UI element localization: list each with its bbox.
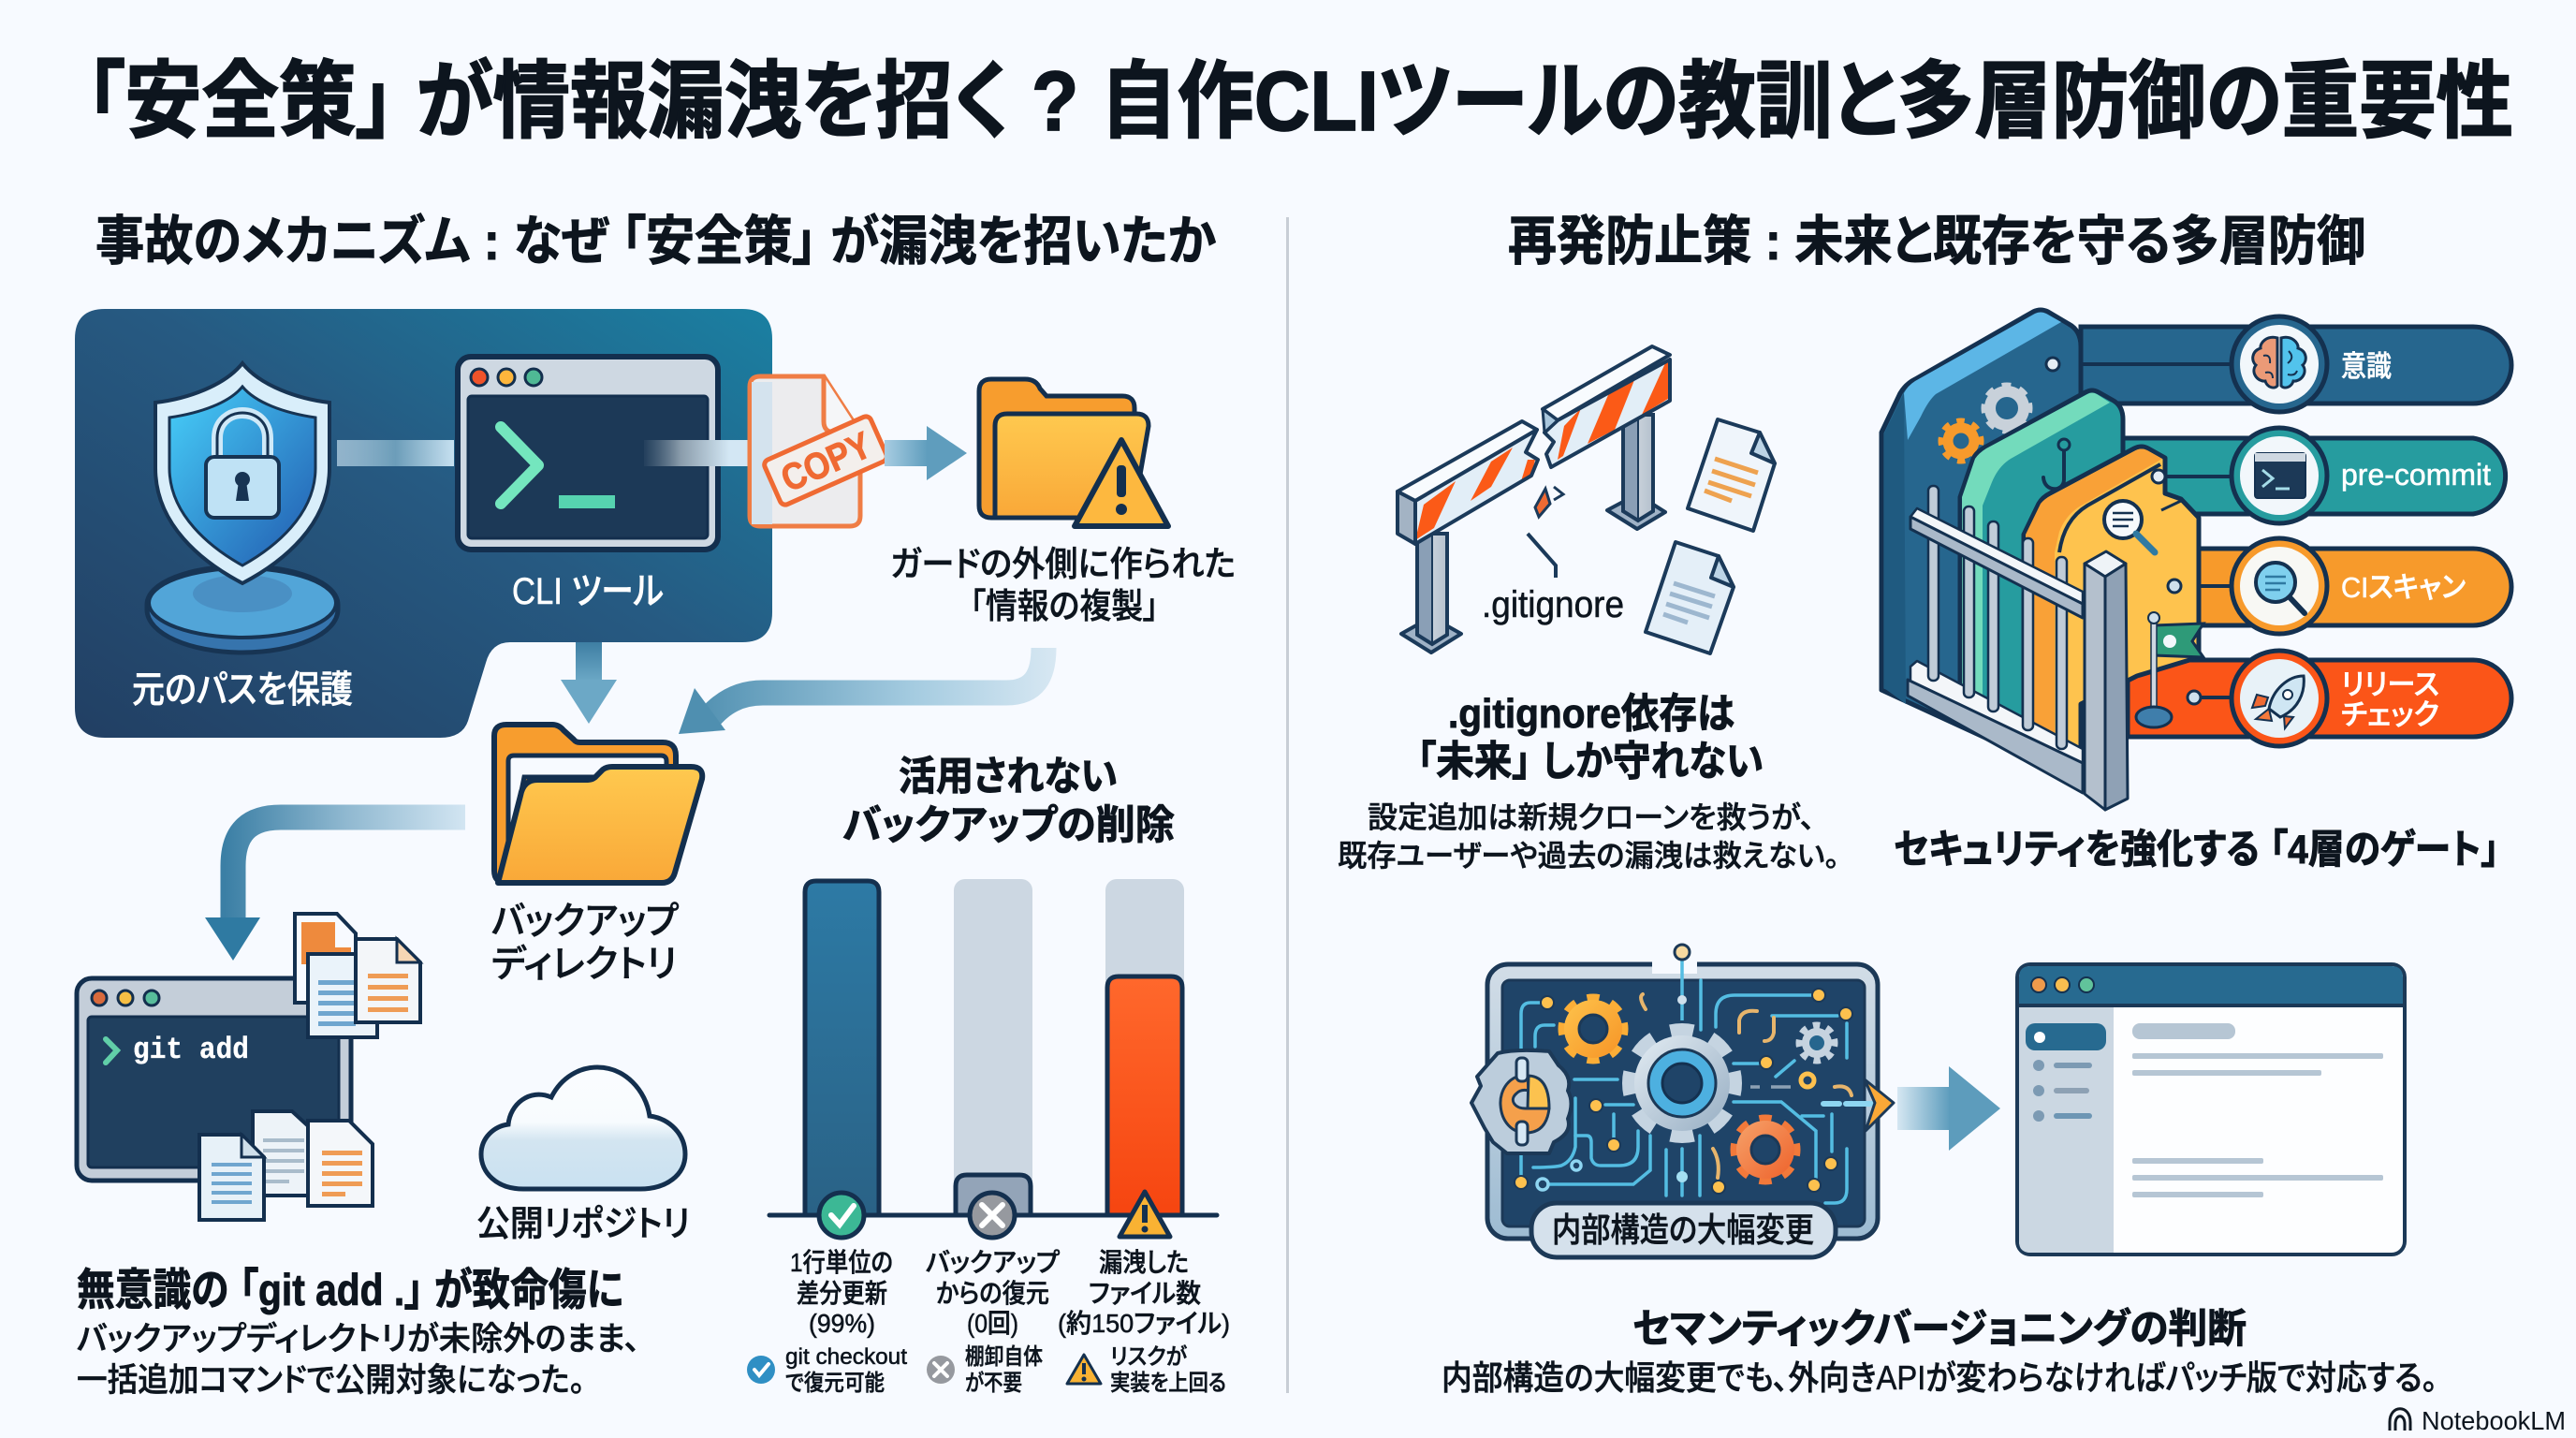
gate plate: teal <box>1960 390 2123 749</box>
illustration: four layer gate <box>1881 310 2511 810</box>
legend: inventory unnecessary: が不要 <box>965 1371 1022 1396</box>
layer pill: pre-commit: pre-commit <box>2341 458 2491 492</box>
circuit nodes <box>1515 989 1852 1194</box>
text block: semantic versioning: 内部構造の大幅変更でも、外向きAPIが変わらなければパッチ版で対応する。 <box>1442 1358 2437 1397</box>
legend: git checkout <box>747 1344 907 1396</box>
heading: right section: 再発防止策 : 未来と既存を守る多層防御 <box>1508 212 2365 271</box>
layer pill: release check: チェック <box>2341 698 2439 731</box>
documents: bottom group <box>199 1111 373 1220</box>
label: backup directory <box>491 901 680 985</box>
icon: copied document with COPY stamp: COPY <box>775 424 878 500</box>
icon: copied document with COPY stamp <box>750 376 888 526</box>
text block: semantic versioning <box>1442 1307 2437 1397</box>
legend: risk exceeds implementation <box>1067 1344 1226 1396</box>
chevron output <box>1865 1079 1894 1131</box>
chart label: one-line diff: (99%) <box>809 1309 875 1338</box>
layer pill: release check <box>2128 651 2511 746</box>
legend: inventory unnecessary <box>927 1344 1043 1396</box>
chart label: leaked files: ファイル数 <box>1089 1279 1201 1308</box>
document: orange lines <box>1688 419 1775 531</box>
gear: large centre <box>1629 1030 1735 1137</box>
label: copies made outside the guard <box>890 545 1236 625</box>
text block: git add fatal wound: 一括追加コマンドで公開対象になった。 <box>77 1362 585 1399</box>
pill: label <box>1531 1203 1836 1257</box>
illustration: broken gitignore barricade <box>1398 346 1775 653</box>
bar: restore from backup <box>956 1175 1031 1215</box>
broken fragments <box>1528 487 1563 578</box>
chart label: one-line diff: 1行単位の <box>790 1248 893 1277</box>
layer pill: release check: リリース <box>2341 668 2439 701</box>
front fence <box>1908 486 2128 810</box>
bar: one-line diff update <box>805 881 879 1215</box>
arrow: curved from copy to backup folder <box>679 648 1044 734</box>
gear: small grey <box>1799 1025 1835 1061</box>
text block: semantic versioning: セマンティックバージョニングの判断 <box>1632 1307 2247 1352</box>
chart label: leaked files: (約150ファイル) <box>1058 1309 1230 1338</box>
chart label: one-line diff <box>790 1248 893 1338</box>
text block: gitignore only protects the future: 「未来」 しか守れない <box>1417 739 1764 785</box>
chart label: restore from backup: バックアップ <box>926 1248 1061 1277</box>
text block: git add fatal wound: 無意識の 「git add .」 が致命傷に <box>77 1265 623 1314</box>
chart label: restore from backup: (0回) <box>967 1309 1018 1338</box>
icon: backup folder <box>494 725 702 883</box>
label: protect original path: 元のパスを保護 <box>132 669 353 711</box>
label: .gitignore: .gitignore <box>1482 584 1624 625</box>
text block: git add fatal wound: バックアップディレクトリが未除外のまま、 <box>77 1321 640 1357</box>
text block: git add fatal wound <box>77 1265 640 1399</box>
arrow: internal change to unchanged API <box>1897 1066 2000 1151</box>
bar: leaked files <box>1107 976 1182 1215</box>
layer pill: awareness <box>2053 316 2511 412</box>
broken link component <box>1471 1050 1571 1153</box>
label: backup directory: バックアップ <box>491 901 680 942</box>
icon: warning <box>1120 1192 1170 1237</box>
bar chart <box>769 879 1217 1238</box>
label: public repository: 公開リポジトリ <box>476 1205 690 1244</box>
label: CLI tool: CLI ツール <box>512 571 664 612</box>
arrow: copy to outside folder <box>885 426 967 480</box>
legend: git checkout: git checkout <box>785 1344 907 1370</box>
icon: git add terminal with documents: git add <box>133 1033 249 1067</box>
icon: git add terminal with documents <box>77 914 420 1220</box>
chart label: restore from backup <box>926 1248 1061 1338</box>
barricade left beam <box>1398 421 1538 544</box>
arrow: backup folder down to git add <box>205 817 465 961</box>
text block: gitignore only protects the future: .gitignore依存は <box>1448 691 1734 737</box>
chart label: restore from backup: からの復元 <box>936 1279 1049 1308</box>
legend: risk exceeds implementation: 実装を上回る <box>1110 1371 1226 1396</box>
panel: protected path <box>75 309 772 738</box>
chart label: leaked files: 漏洩した <box>1099 1248 1189 1277</box>
barricade right beam <box>1543 346 1670 467</box>
circuit traces <box>1521 980 1847 1203</box>
icon: cross <box>970 1193 1015 1238</box>
icon: check <box>819 1193 864 1238</box>
heading: bar chart: 活用されない <box>899 755 1118 800</box>
layer pill: CI scan: CIスキャン <box>2341 571 2466 604</box>
layer pill: pre-commit <box>2123 428 2506 523</box>
label: copies made outside the guard: ガードの外側に作られた <box>890 545 1236 583</box>
logo: NotebookLM: NotebookLM <box>2422 1406 2566 1435</box>
caption: four layer gate: セキュリティを強化する 「4層のゲート」 <box>1894 828 2499 873</box>
chart label: leaked files <box>1058 1248 1230 1338</box>
pill: label: 内部構造の大幅変更 <box>1552 1211 1814 1249</box>
gate plate: blue <box>1881 310 2081 782</box>
heading: left section: 事故のメカニズム : なぜ 「安全策」 が漏洩を招いたか <box>95 212 1216 271</box>
documents: top group <box>295 914 420 1037</box>
layer pill: CI scan <box>2174 538 2511 634</box>
legend: risk exceeds implementation: リスクが <box>1110 1344 1187 1370</box>
illustration: internal structure circuit board <box>1471 945 1894 1257</box>
heading: bar chart <box>842 755 1175 848</box>
gate plate: orange <box>2024 447 2199 758</box>
icon: shield on pedestal <box>147 363 338 653</box>
icon: folder with warning <box>979 379 1168 526</box>
text block: gitignore only protects the future: 既存ユーザーや過去の漏洩は救えない。 <box>1338 839 1839 873</box>
legend: inventory unnecessary: 棚卸自体 <box>965 1344 1043 1370</box>
text block: gitignore only protects the future: 設定追加は新規クローンを救うが、 <box>1368 800 1815 834</box>
document: blue lines <box>1646 542 1734 653</box>
text block: gitignore only protects the future <box>1338 691 1839 873</box>
icon: CLI terminal window <box>458 357 718 550</box>
label: backup directory: ディレクトリ <box>491 944 677 985</box>
chart label: one-line diff: 差分更新 <box>797 1279 887 1308</box>
illustration: unchanged application window <box>2017 964 2405 1255</box>
icon: cloud <box>481 1067 685 1189</box>
legend: git checkout: で復元可能 <box>785 1371 885 1396</box>
arrow: panel down to backup folder <box>561 642 617 724</box>
barricade right post <box>1607 415 1665 529</box>
gear: orange bottom <box>1734 1119 1796 1181</box>
heading: bar chart: バックアップの削除 <box>842 803 1175 848</box>
barricade left post <box>1401 534 1461 653</box>
flag and pole <box>2136 612 2203 727</box>
layer pill: awareness: 意識 <box>2341 350 2392 383</box>
gear: orange top <box>1562 998 1624 1060</box>
label: copies made outside the guard: 「情報の複製」 <box>970 587 1159 625</box>
